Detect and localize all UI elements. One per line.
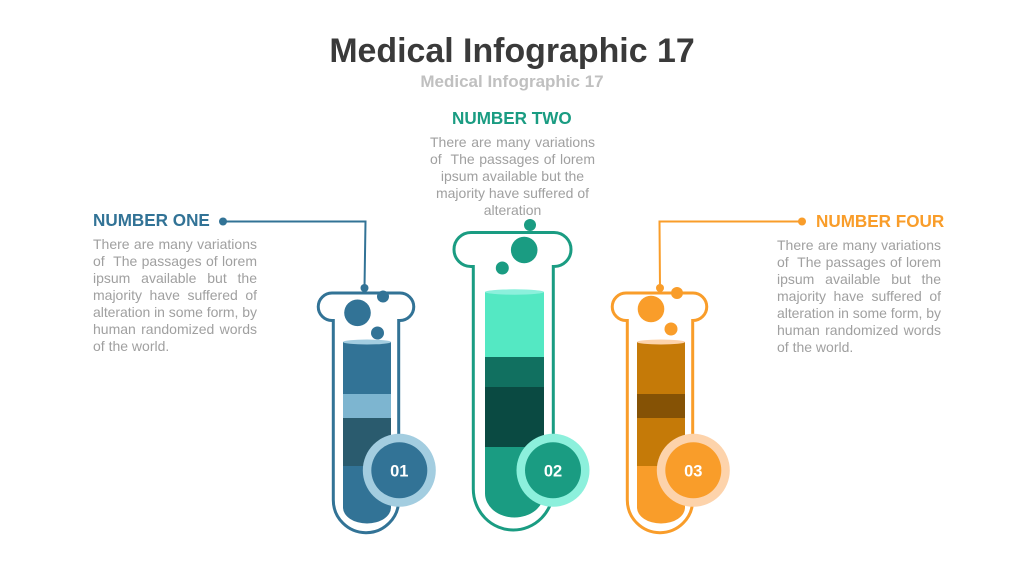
tube 03 liquid xyxy=(637,340,685,524)
text block: number four: There are many variations xyxy=(777,237,941,253)
text block: number one: There are many variations xyxy=(93,236,257,252)
tube 01 xyxy=(219,218,436,533)
text block: number four: human randomized words xyxy=(777,322,941,338)
text block: number two: of The passages of lorem xyxy=(430,151,595,167)
heading: number one: NUMBER ONE xyxy=(93,211,210,230)
subtitle: Medical Infographic 17 xyxy=(420,72,604,91)
text block: number one xyxy=(93,236,257,354)
tube 01 glass xyxy=(318,293,414,533)
text block: number two: majority have suffered of xyxy=(436,185,589,201)
heading: number four: NUMBER FOUR xyxy=(816,212,944,231)
badge 02 xyxy=(516,434,590,507)
tube 01 bubbles xyxy=(344,290,389,340)
text block: number two: alteration xyxy=(484,202,541,218)
text block: number two: ipsum available but the xyxy=(441,168,584,184)
text block: number one: of The passages of lorem xyxy=(93,253,257,269)
tube 01 liquid xyxy=(343,340,391,524)
text block: number four: ipsum available but the xyxy=(777,271,941,287)
tube 02 xyxy=(454,219,590,530)
text block: number four: of The passages of lorem xyxy=(777,254,941,270)
tube 02 liquid xyxy=(485,289,544,518)
tube 03 bubbles xyxy=(638,287,683,336)
text block: number four: of the world. xyxy=(777,339,853,355)
badge 01: 01 xyxy=(390,462,408,480)
text block: number four: alteration in some form, by xyxy=(777,305,941,321)
connector line 03 xyxy=(656,218,806,292)
text block: number one: majority have suffered of xyxy=(93,287,257,303)
text block: number one: of the world. xyxy=(93,338,169,354)
text block: number two xyxy=(430,134,595,218)
text block: number one: human randomized words xyxy=(93,321,257,337)
connector line 01 xyxy=(219,218,368,292)
badge 03: 03 xyxy=(684,462,702,480)
tube 02 bubbles xyxy=(496,219,538,274)
tube 03 glass xyxy=(612,293,707,533)
badge 01 xyxy=(363,434,436,507)
badge 02: 02 xyxy=(544,462,562,480)
text block: number one: ipsum available but the xyxy=(93,270,257,286)
heading: number two: NUMBER TWO xyxy=(452,109,572,128)
badge 03 xyxy=(657,434,730,507)
text block: number four: majority have suffered of xyxy=(777,288,941,304)
text block: number four xyxy=(777,237,941,355)
text block: number two: There are many variations xyxy=(430,134,595,150)
title: Medical Infographic 17 xyxy=(329,32,695,70)
tube 02 glass xyxy=(454,232,571,530)
tube 03 xyxy=(612,218,806,533)
text block: number one: alteration in some form, by xyxy=(93,304,257,320)
